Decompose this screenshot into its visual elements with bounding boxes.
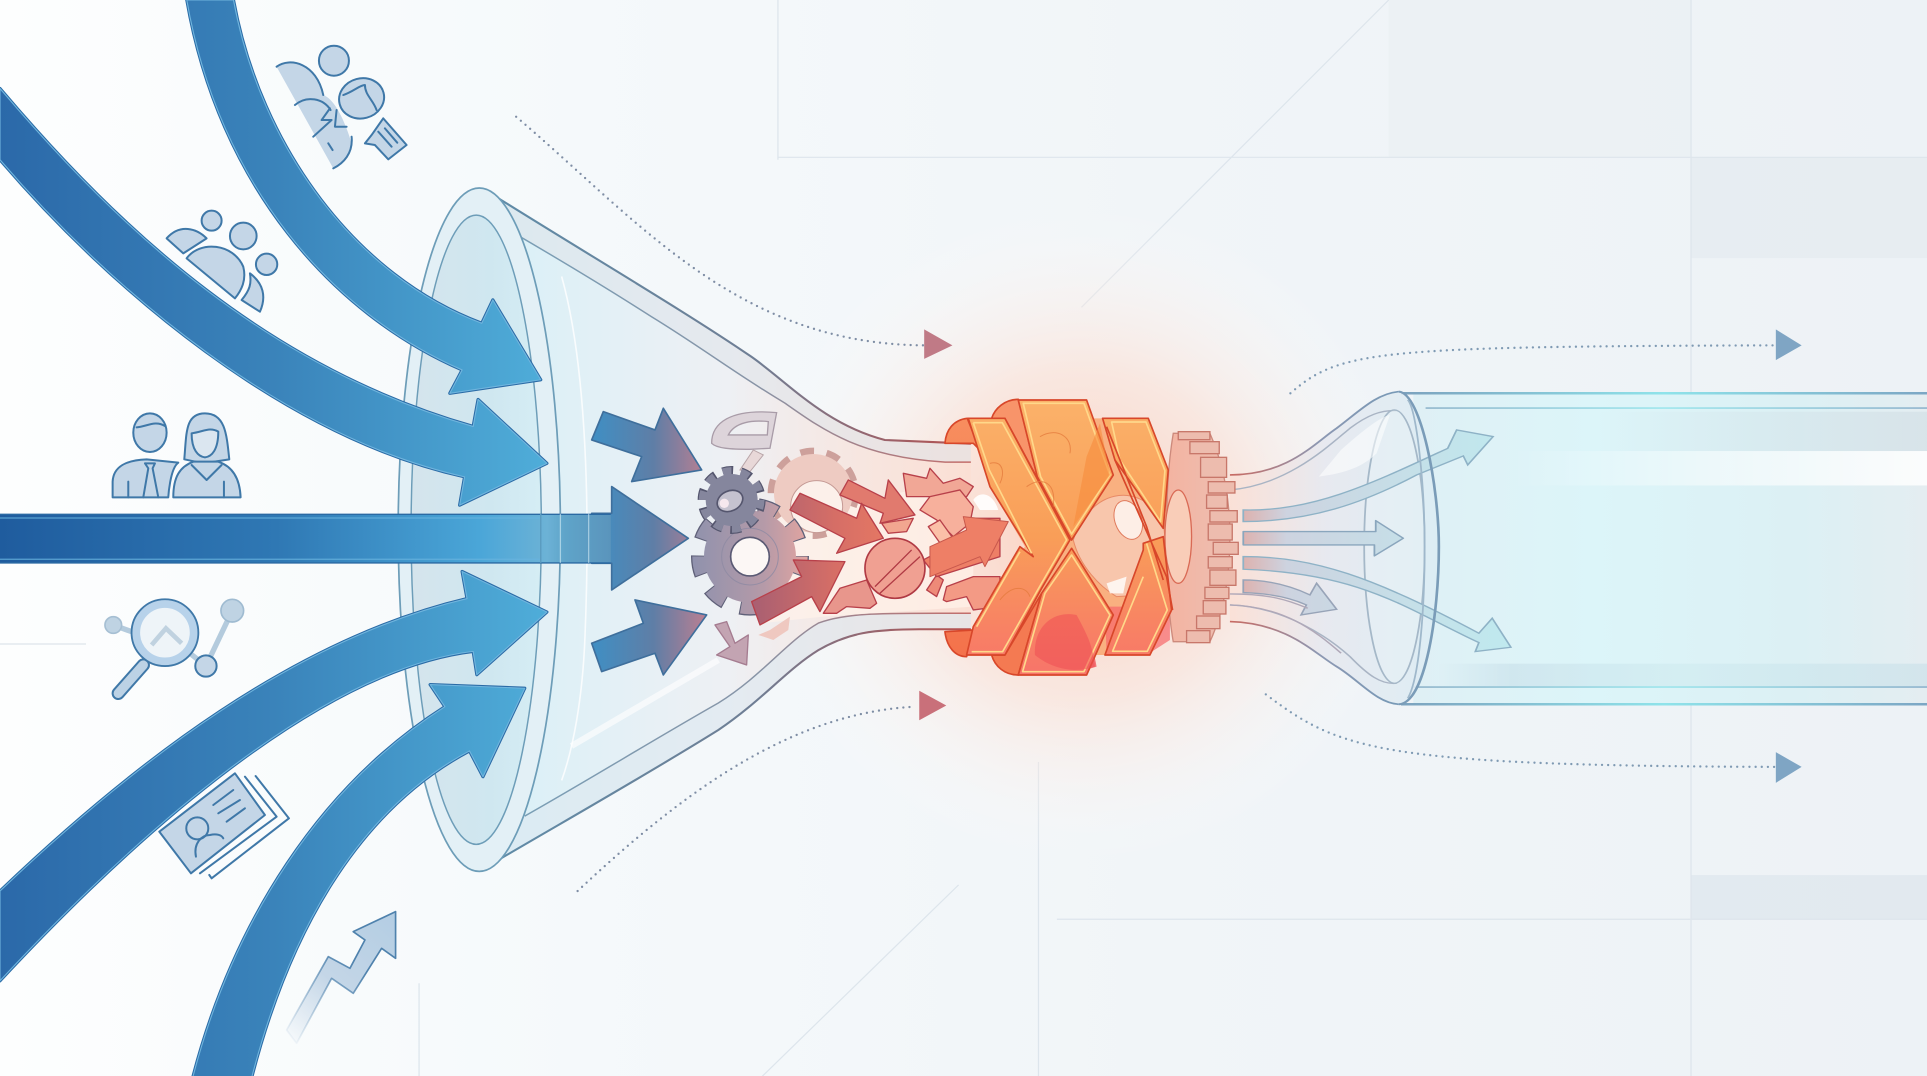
right ribbon	[1103, 418, 1168, 528]
output arrow: rising	[1243, 430, 1493, 522]
orange heat glow	[750, 203, 1413, 866]
centre ribbon	[1018, 400, 1113, 540]
input arrow: top	[187, 0, 541, 393]
input arrow: straight centre bar	[0, 514, 611, 563]
icon: magnifier on chart	[105, 599, 244, 693]
output flare funnel	[1230, 392, 1511, 704]
jam arrows	[840, 480, 915, 523]
input arrow: fifth	[193, 685, 525, 1076]
pink arrow fragments	[823, 580, 877, 613]
rear toothed gear	[1165, 432, 1238, 643]
dotted arrow: upper left	[516, 117, 952, 359]
cylinder sides	[945, 418, 980, 450]
slotted screw head	[865, 538, 925, 598]
input arrow: fourth	[0, 571, 547, 981]
output arrow: small lower	[1243, 580, 1337, 615]
icon: group of people	[167, 211, 277, 312]
dotted arrow: upper right	[1290, 329, 1802, 393]
output arrow: falling	[1243, 557, 1511, 652]
small dark gear	[703, 471, 760, 529]
large gray gear	[700, 507, 800, 607]
pale gear	[773, 453, 854, 534]
left ribbon	[967, 418, 1070, 655]
output tube	[1401, 393, 1927, 704]
icon: team with speech bubble	[277, 46, 407, 168]
input funnel	[398, 188, 971, 871]
D-shaped gray part	[712, 412, 777, 449]
slate arrows inside funnel	[592, 408, 707, 675]
band interior	[968, 418, 1168, 655]
input arrow: second	[0, 88, 547, 505]
arrow passing behind band	[930, 517, 1008, 577]
icon: rising trend arrow	[287, 912, 396, 1043]
icon: ID cards	[159, 773, 289, 878]
twisted orange constriction band	[930, 399, 1238, 675]
output arrow: straight	[1243, 521, 1403, 556]
dotted arrow: lower left	[578, 691, 946, 891]
jammed gears and arrows	[700, 412, 1000, 665]
icon: man and woman	[113, 413, 241, 497]
dotted arrow: lower right	[1266, 694, 1802, 783]
